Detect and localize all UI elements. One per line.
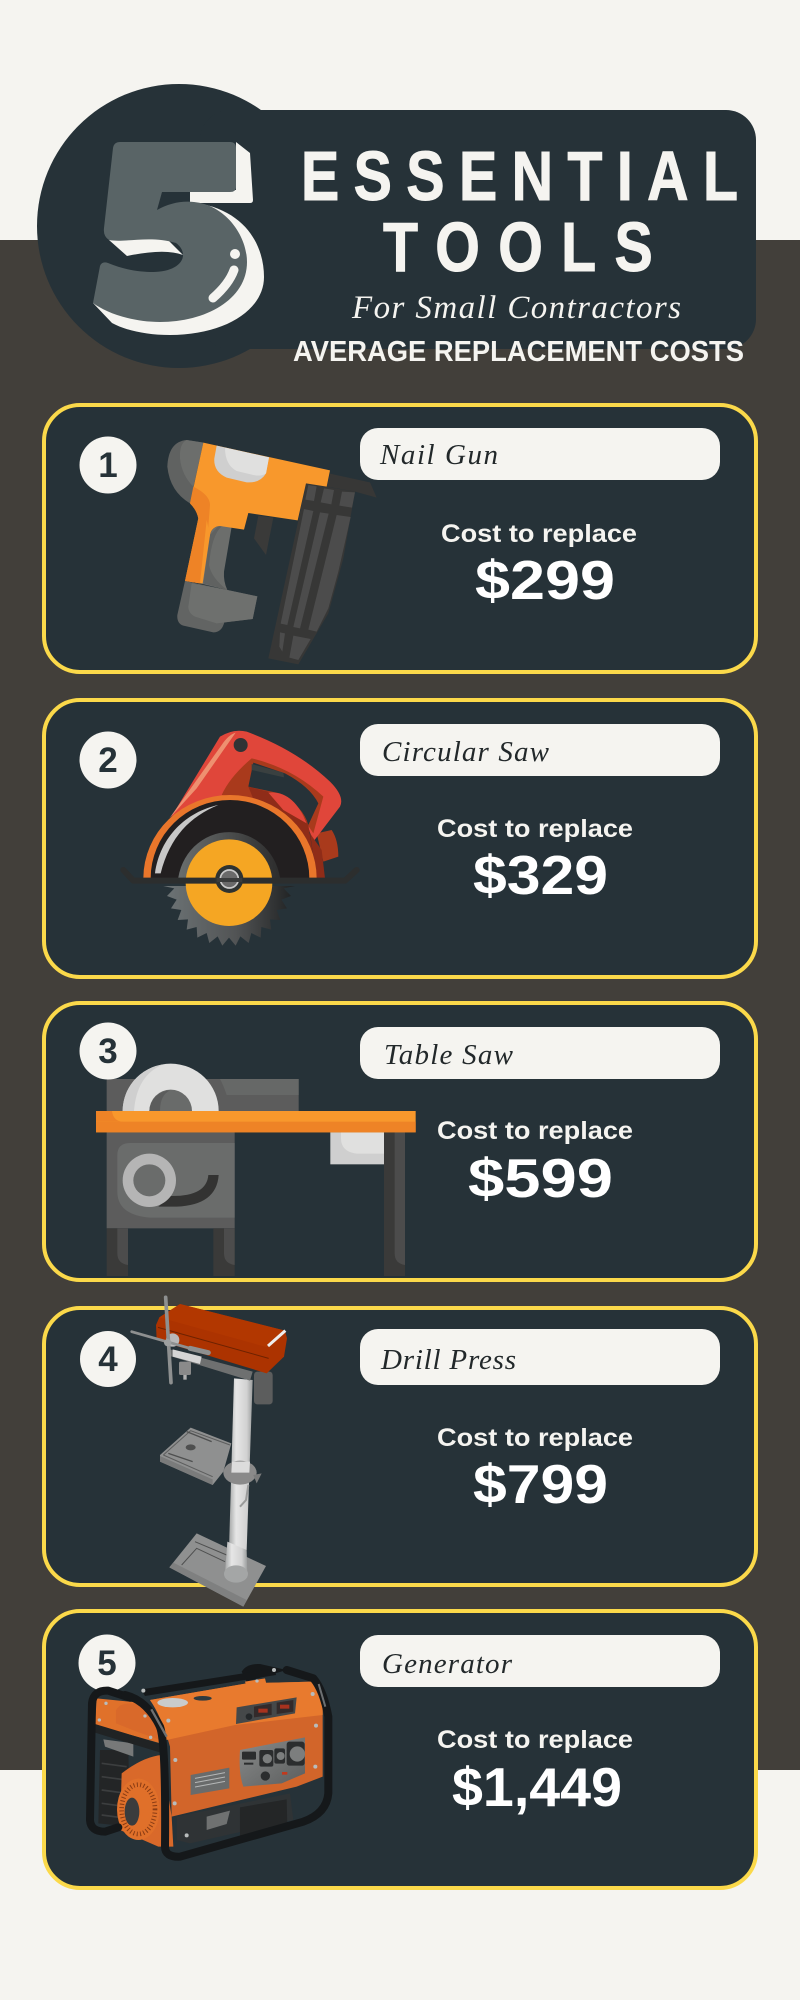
tool name pill: Nail Gun (379, 439, 498, 471)
title (301, 137, 738, 286)
cost label: Cost to replace (437, 1726, 633, 1754)
card frame (44, 1003, 756, 1280)
tool name pill (360, 724, 720, 776)
header shape (37, 84, 756, 368)
icon: big number 5 (93, 142, 264, 335)
heading: average replacement costs: AVERAGE REPLACEMENT COSTS (293, 336, 744, 368)
header badge (37, 84, 756, 368)
number badge 4: 4 (98, 1340, 118, 1379)
icon: table saw (96, 1064, 416, 1276)
title: TOOLS (383, 208, 653, 286)
cost label: Cost to replace (441, 520, 637, 548)
icon: nail gun (167, 440, 377, 664)
cost label: Cost to replace (437, 1117, 633, 1145)
tool name pill (360, 1027, 720, 1079)
icon: generator (90, 1664, 328, 1857)
panel: generator (44, 1611, 756, 1888)
tool name pill: Circular Saw (382, 736, 550, 768)
dark background band (0, 240, 800, 1770)
number badge 2 (80, 732, 136, 788)
tool name pill: Drill Press (380, 1344, 516, 1376)
price: $1,449 (452, 1756, 622, 1818)
price: $329 (473, 844, 608, 906)
tool name pill: Table Saw (384, 1039, 514, 1071)
number badge 4 (80, 1331, 136, 1387)
cost label: Cost to replace (437, 815, 633, 843)
number badge 3: 3 (98, 1032, 118, 1071)
icon: circular saw (123, 731, 357, 946)
number badge 3 (80, 1022, 136, 1080)
number badge 1: 1 (98, 446, 118, 485)
number badge 5: 5 (97, 1644, 117, 1683)
price: $599 (468, 1147, 613, 1209)
card frame (44, 1611, 756, 1888)
panel: table saw (44, 1003, 756, 1280)
tool name pill (360, 428, 720, 480)
price: $799 (473, 1453, 608, 1515)
number badge 5 (78, 1634, 136, 1692)
title: ESSENTIAL (301, 137, 738, 215)
card frame (44, 405, 756, 672)
tool name pill: Generator (382, 1648, 513, 1680)
subtitle: For Small Contractors (351, 290, 681, 326)
tool name pill (360, 1635, 720, 1687)
number badge 1 (80, 436, 136, 494)
cost label: Cost to replace (437, 1424, 633, 1452)
price: $299 (475, 549, 615, 611)
panel: circular saw (44, 700, 756, 977)
panel: nail gun (44, 405, 756, 672)
number badge 2: 2 (98, 741, 118, 780)
card frame (44, 1308, 756, 1585)
card frame (44, 700, 756, 977)
tool name pill (360, 1329, 720, 1385)
icon: drill press (132, 1297, 287, 1607)
panel: drill press (44, 1297, 756, 1607)
